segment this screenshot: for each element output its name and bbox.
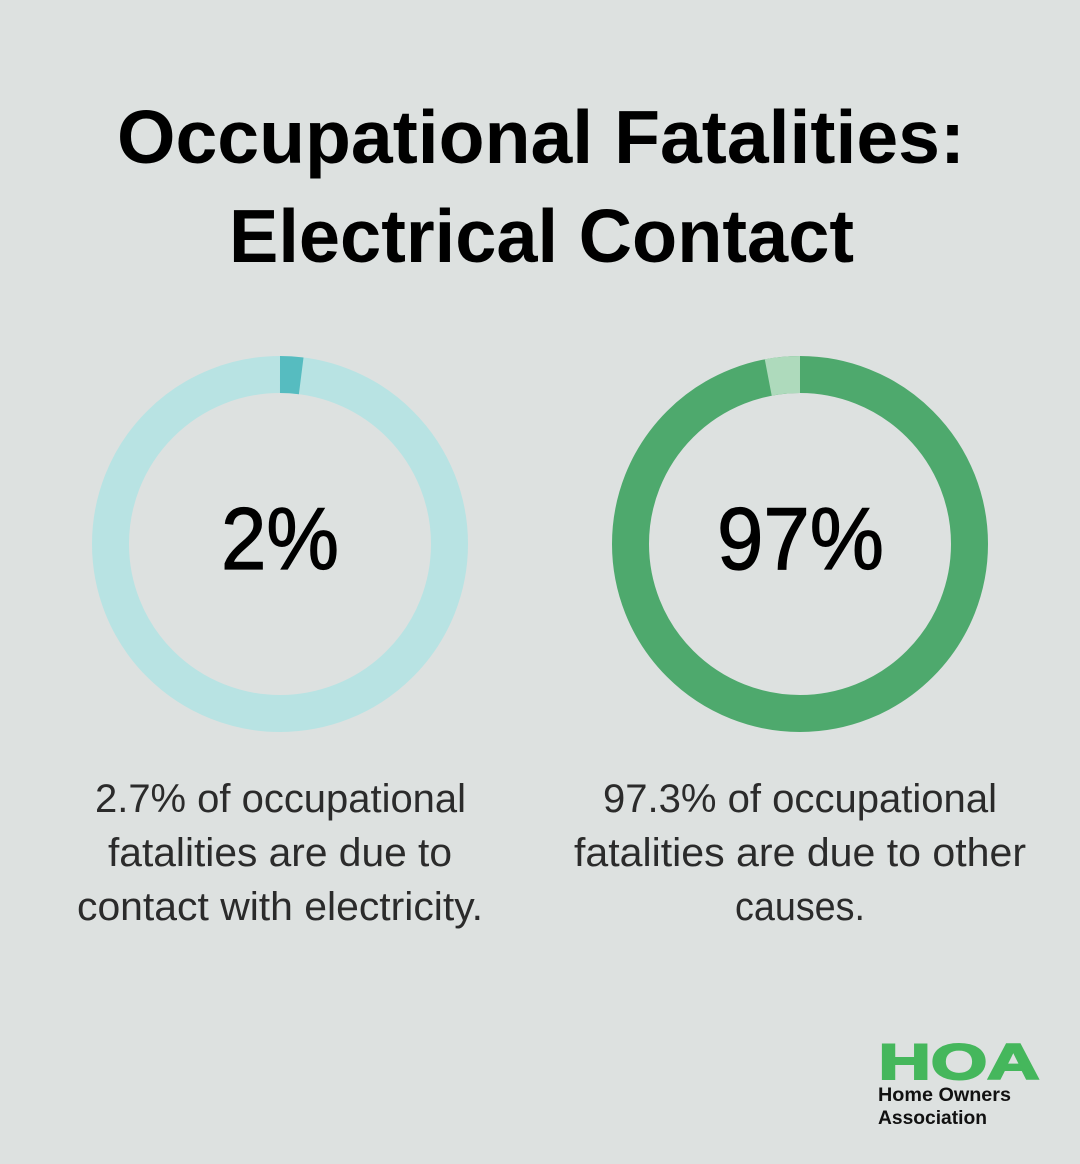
- description: electricity: [77, 777, 483, 929]
- description: electricity: contact with electricity.: [77, 885, 483, 929]
- title: Electrical Contact: [229, 194, 854, 278]
- panel: other causes share: [574, 374, 1026, 929]
- description: electricity: fatalities are due to: [108, 831, 452, 875]
- description: electricity: 2.7% of occupational: [95, 777, 466, 821]
- value: 2%: 2%: [221, 489, 339, 588]
- value: 97%: 97%: [717, 489, 884, 588]
- description: other causes: fatalities are due to other: [574, 831, 1026, 875]
- logo: Home Owners Association: Association: [878, 1108, 987, 1129]
- logo: Home Owners Association: HOA: [878, 1034, 1040, 1090]
- description: other causes: 97.3% of occupational: [603, 777, 997, 821]
- logo: Home Owners Association: [878, 1034, 1040, 1129]
- donut chart: 97%: [630, 374, 970, 714]
- donut chart: 2%: [110, 374, 450, 714]
- panel: electrical contact share: [77, 374, 483, 929]
- description: other causes: [574, 777, 1026, 929]
- title: Occupational Fatalities:: [117, 95, 965, 179]
- logo: Home Owners Association: Home Owners: [878, 1085, 1011, 1106]
- title: [117, 95, 965, 278]
- description: other causes: causes.: [735, 885, 865, 929]
